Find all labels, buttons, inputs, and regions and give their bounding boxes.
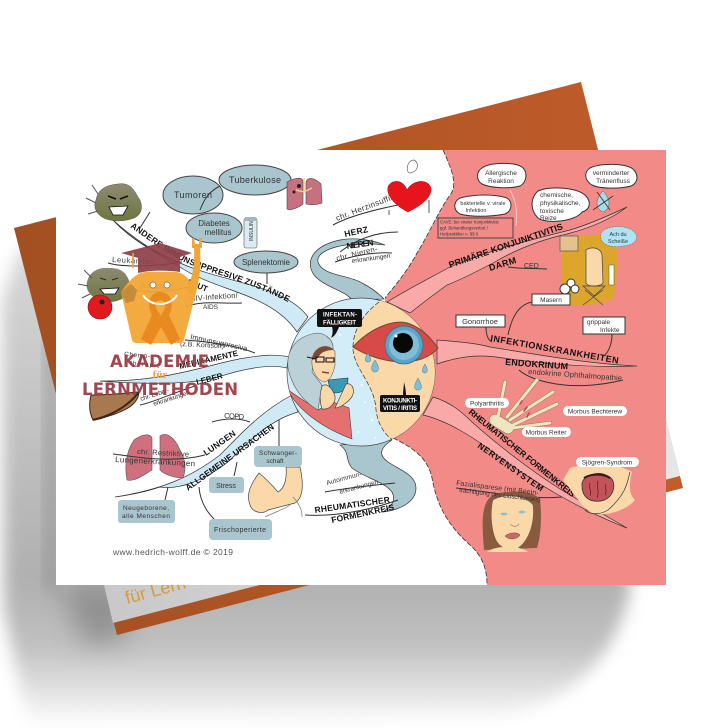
branch: Blut: HIV-Infektion/ (190, 291, 239, 303)
icon: large lungs (126, 435, 185, 480)
logo: tassel (132, 253, 134, 268)
branch: Infektionskrankheiten (486, 302, 619, 366)
glasses (307, 357, 334, 362)
branch: Rheumatischer Formenkreis left: FORMENKREIS (330, 502, 395, 525)
icon: insulin vial: INSULIN (249, 221, 255, 241)
cloud: Allergische Reaktion: Allergische (485, 170, 517, 177)
box: Gonorrhoe: Gonorrhoe (462, 317, 498, 326)
branch: Medikamente: (z.B. Kortison) (180, 341, 224, 350)
branch: Lungen: LUNGEN (201, 428, 237, 458)
text: Fazialisparese (456, 480, 541, 504)
branch: Darm (488, 255, 539, 273)
branch: Allgemeine Ursachen: ALLGEMEINE URSACHEN (183, 422, 276, 493)
cloud: chemische Reize: toxische (540, 208, 564, 215)
branch: Rheumatischer Formenkreis left: erkrankungen (339, 479, 380, 496)
cloud: thought bubble: Ach du (609, 232, 627, 238)
leukemia monster and blood cell (78, 268, 130, 319)
branch: Herz und Nieren: chr. Herzinsuffizienz (334, 187, 411, 223)
cloud: chemische Reize (532, 188, 589, 222)
box: Neugeborene: Neugeborene, (123, 505, 169, 512)
pill: Morbus Reiter: Morbus Reiter (526, 430, 567, 436)
bubble: Konjunktivitis: VITIS / IRITIS (383, 406, 417, 412)
bubble: Infektanfälligkeit: FÄLLIGKEIT (323, 320, 356, 326)
cloud: chemische Reize: physikalische, (540, 200, 581, 207)
pill: Morbus Bechterew: Morbus Bechterew (568, 408, 622, 416)
branch: Lungen: chr. Restriktive (137, 447, 189, 459)
cloud: Allergische Reaktion: Reaktion (488, 178, 514, 185)
icon: heart (388, 160, 431, 215)
bubble: Infektanfälligkeit (317, 309, 362, 338)
cloud: thought bubble: Scheiße (608, 239, 628, 245)
branch: Leber (139, 371, 224, 408)
icon: mouth and tongue (563, 464, 635, 514)
branch: Herz und Nieren: HERZ (343, 224, 369, 239)
logo: mascot body (121, 272, 196, 343)
cloud: verminderter Tränenfluss: verminderter (593, 170, 630, 177)
branch: Medikamente: Immunsuppresiva (190, 332, 249, 353)
icon: small lungs (287, 178, 322, 210)
cropped card text: für Lern (123, 572, 188, 608)
branch: blue streams left (100, 220, 308, 497)
box: Schwangerschaft: schaft (266, 458, 284, 465)
branch: Blut (108, 255, 242, 311)
branch: Medikamente: MEDIKAMENTE (178, 349, 240, 371)
pill: Sjögren-Syndrom (576, 457, 639, 467)
branch: Endokrinum: endokrine Ophthalmopathie (528, 367, 622, 383)
branch: Darm: CED (524, 263, 539, 270)
lips (322, 372, 329, 373)
box: Frischoperierte (209, 519, 272, 540)
cloud: Tumoren (140, 176, 223, 228)
branch: Lungen: Lungenerkrankungen (115, 455, 195, 468)
coat (288, 390, 352, 439)
peach face area (352, 300, 435, 440)
logo: eyes (150, 282, 170, 288)
branch: Blut: BLUT (186, 278, 209, 294)
branch: Endokrinum: ENDOKRINUM (505, 357, 568, 371)
branch: Rheumatischer Formenkreis left: RHEUMATISCHER (314, 495, 391, 515)
cloud: chemische Reize: chemische, (540, 192, 573, 199)
cloud: Diabetes mellitus: Diabetes (198, 219, 230, 228)
logo: smile (143, 295, 177, 304)
box: Stress (209, 477, 244, 493)
eye (353, 322, 438, 364)
branch: Andere immunsuppresive Zustände: ANDERE IMMUNSUPPRESIVE ZUSTÄNDE (130, 224, 290, 302)
branch: Medikamente: therapie (130, 360, 161, 370)
branch: Leber: LEBER (195, 371, 224, 387)
box: Masern (532, 294, 570, 305)
logo: graduation cap (121, 243, 192, 273)
icon: person on toilet (560, 235, 617, 305)
tears (365, 353, 427, 390)
logo: wordmark: AKADEMIE (110, 352, 209, 371)
icon: insulin vial (244, 217, 257, 248)
cloud: thought bubble (601, 227, 637, 247)
branch: Darm: DARM (488, 255, 517, 273)
bubble: Konjunktivitis: KONJUNKTI- (383, 398, 417, 404)
icon: woman face with facial paresis (483, 492, 541, 552)
text: Fazialisparese: trächtigung des Lidschlusses) (459, 487, 541, 504)
branch: Blut: Leukämien (112, 255, 154, 266)
branch: Herz und Nieren: NIEREN (346, 237, 374, 251)
cloud: Diabetes mellitus (186, 213, 242, 243)
branch: Endokrinum (505, 357, 622, 383)
icon: tumor monster top (86, 184, 141, 221)
logo: wordmark (82, 352, 238, 399)
cloud: Allergische Reaktion (478, 163, 526, 226)
cloud: bakterielle Infektion: Infektion (466, 208, 486, 214)
logo: raised arm (187, 238, 202, 296)
branch: Leber: erkrankungen (152, 389, 191, 408)
main panel (56, 150, 666, 585)
snow (338, 334, 376, 439)
logo: wordmark: für (153, 369, 167, 381)
pill: Polyarthritis: Polyarthritis (470, 400, 505, 408)
bubble: Infektanfälligkeit: INFEKTAN- (323, 312, 357, 318)
box: Gonorrhoe (456, 315, 505, 327)
branch: grey streams to heart and rheuma (310, 239, 416, 512)
cloud: Splenektomie: Splenektomie (242, 258, 291, 267)
branch: Rheumatischer Formenkreis left: Autoimmun- (326, 471, 362, 487)
cloud: Tuberkulose: Tuberkulose (229, 175, 281, 185)
hair (312, 346, 334, 360)
pill: Morbus Reiter (522, 427, 571, 437)
drop shadow (2, 240, 630, 726)
box: Schwangerschaft: Schwanger- (259, 450, 297, 457)
cup (328, 378, 348, 393)
box: CAVE warning (438, 218, 513, 238)
icon: liver (90, 392, 139, 420)
box: Frischoperierte: Frischoperierte (214, 527, 266, 534)
icon: crossed tear (593, 191, 613, 212)
pill: Morbus Bechterew (563, 406, 627, 416)
branch: Herz und Nieren (333, 187, 425, 265)
back card: orange poster (14, 82, 683, 635)
box: CAVE warning: ggf. Behandlungsverbot / (440, 226, 489, 230)
branch: Nervensystem: NERVENSYSTEM (476, 440, 545, 493)
box: Masern: Masern (540, 297, 562, 304)
branch: Medikamente: Chemo- (124, 351, 150, 360)
hands (320, 384, 353, 409)
central circle (287, 298, 445, 446)
branch: Herz und Nieren: chr. Nieren- (335, 244, 379, 263)
branch: Rheumatischer Formenkreis left (305, 471, 398, 525)
branch: Lungen: COPD (224, 411, 245, 421)
cloud: verminderter Tränenfluss: Tränenfluss (596, 178, 631, 185)
box: Neugeborene (118, 500, 175, 523)
box: CAVE warning: CAVE: bei viraler Konjunktivitis (440, 220, 499, 224)
cloud: verminderter Tränenfluss (586, 164, 637, 188)
back card: grey inner sheet (60, 400, 680, 623)
pill: Sjögren-Syndrom: Sjögren-Syndrom (582, 460, 632, 466)
box: Schwangerschaft (254, 446, 302, 467)
cloud: bakterielle Infektion (455, 195, 511, 216)
branch: Leber: chr. Leber- (139, 387, 170, 403)
logo: wordmark: LERNMETHODEN (82, 380, 238, 399)
box: grippale Infekte: grippale (587, 319, 611, 326)
pill: Polyarthritis (465, 398, 509, 408)
icon: pregnant belly (248, 467, 302, 517)
branch: Rheumatischer Formenkreis right: RHEUMATISCHER FORMENKREIS (467, 407, 577, 499)
branch: Allgemeine Ursachen (165, 420, 279, 519)
box: Neugeborene: alle Menschen (122, 513, 170, 520)
branch: Primäre Konjunktivitis: PRIMÄRE KONJUNKTIVITIS (447, 221, 564, 270)
cloud: Tuberkulose (200, 165, 291, 210)
box: grippale Infekte: Infekte (600, 327, 620, 334)
text: Fazialisparese: Fazialisparese (mit Beein- (456, 480, 540, 497)
branch: Blut: Anämien (140, 281, 174, 292)
logo overlay (82, 238, 238, 399)
bubble: Konjunktivitis (380, 382, 420, 412)
hood and scarf (288, 333, 333, 410)
logo: ribbon (141, 292, 180, 345)
branch: Medikamente (124, 332, 255, 371)
face (312, 348, 335, 382)
box: Stress: Stress (216, 483, 236, 490)
branch: Infektionskrankheiten: INFEKTIONSKRANKHEITEN (490, 333, 619, 366)
branch: Herz und Nieren: erkrankungen (351, 253, 391, 265)
cloud: Diabetes mellitus: mellitus (204, 228, 232, 237)
text: website credit: www.hedrich-wolff.de © 2019 (112, 547, 233, 557)
branch: Blut: AIDS (203, 304, 219, 311)
branch: pink streams right (387, 207, 637, 528)
box: grippale Infekte (583, 317, 625, 334)
cloud: bakterielle Infektion: bakterielle v. virale (460, 201, 506, 207)
pink right region (385, 150, 666, 585)
logo: left arm blob (121, 284, 137, 303)
icon: hand skeleton (495, 380, 557, 428)
cloud: chemische Reize: Reize (540, 215, 557, 222)
branch: Lungen (113, 411, 250, 468)
box: CAVE warning: Heilpraktiker n. §§ 6 (440, 232, 479, 236)
cloud: Splenektomie (234, 251, 298, 284)
cloud: Tumoren: Tumoren (174, 190, 212, 200)
